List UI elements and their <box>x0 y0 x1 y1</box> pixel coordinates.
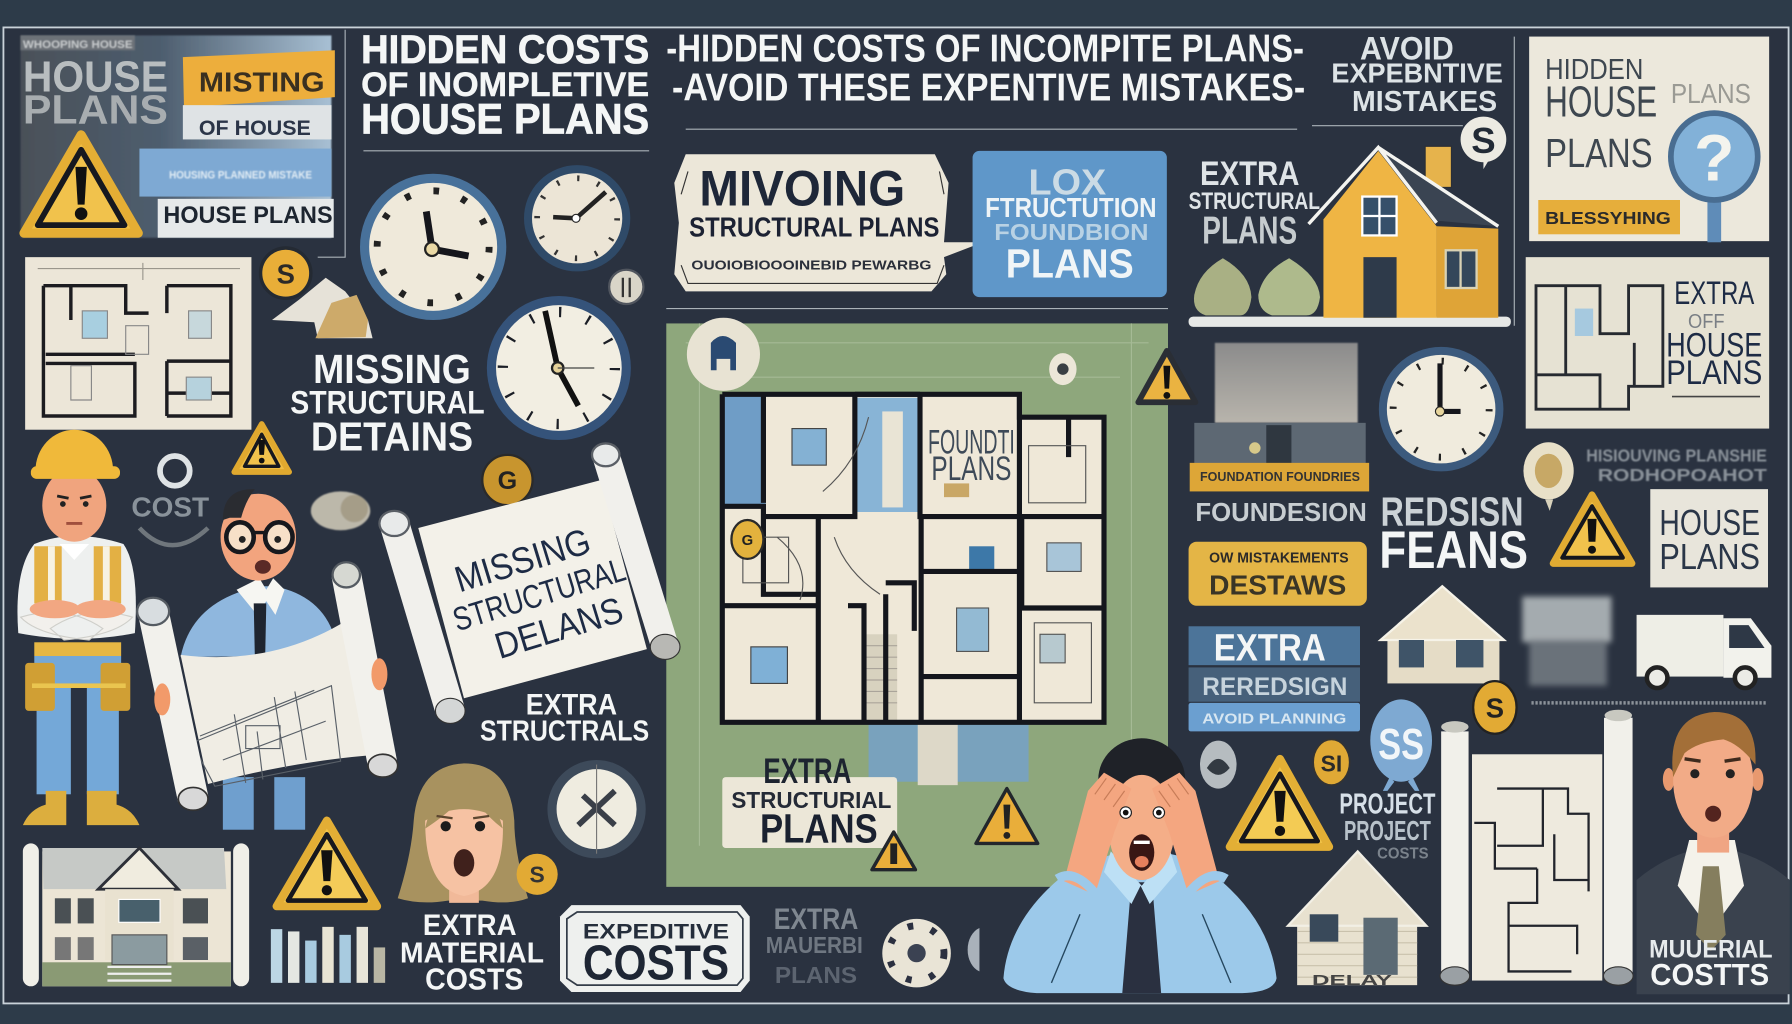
panel: extra house plans sheet: OFF <box>1688 310 1725 333</box>
panel: foundation illustration <box>1190 343 1369 491</box>
panel: house plans label stack: HOUSE <box>23 53 168 101</box>
text: extra material costs: MATERIAL <box>400 937 544 969</box>
text: missing structural details: MISSING <box>313 346 471 392</box>
heading: avoid expensive mistakes <box>1331 30 1503 118</box>
heading: hidden costs of incomplete house plans: HIDDEN COSTS <box>361 28 649 72</box>
label: extra structural plans: EXTRA <box>763 751 851 791</box>
text: extra structural plans: PLANS <box>1202 209 1297 252</box>
icon: dollar coin <box>261 248 311 298</box>
text: missing structural details: STRUCTURAL <box>290 385 485 421</box>
icon: warning triangle lower right <box>1230 759 1329 847</box>
icon: warning triangles in plan <box>872 789 1038 870</box>
scroll: missing structural delans <box>379 443 680 723</box>
icon: rubble <box>311 491 370 530</box>
divider dots <box>1531 701 1766 704</box>
panel: extra house plans sheet: PLANS <box>1666 354 1762 392</box>
icon: coin with dollar <box>1473 681 1517 734</box>
icon: coin on plan: G <box>742 533 753 549</box>
icon: small half disc <box>968 928 979 971</box>
heading: avoid expensive mistakes: EXPEBNTIVE <box>1331 57 1503 88</box>
orange label <box>183 50 335 107</box>
panel: missing structural plans callout: MIVOING <box>699 160 905 217</box>
icon: circle with x <box>552 765 641 854</box>
text: cost ghost label <box>131 456 209 545</box>
panel: house plans label stack: PLANS <box>23 86 168 132</box>
panel: house photo between scrolls <box>23 843 249 986</box>
text: faded extra material plans: MAUERBI <box>766 932 863 958</box>
icon: suited man: COSTTS <box>1650 957 1769 992</box>
panel: house plans label stack <box>21 35 335 238</box>
panel: top right hidden house plans sheet: PLANS <box>1545 130 1653 176</box>
text: extra structurals: EXTRA <box>526 688 617 721</box>
icon: warning triangle large top left <box>24 135 138 233</box>
text: extra structural plans: STRUCTURAL <box>1189 188 1320 215</box>
label: extra redesign stack <box>1189 626 1360 731</box>
label: yellow designs plate: OW MISTAKEMENTS <box>1209 550 1349 566</box>
panel: blue foundation card: FOUNDBION <box>994 219 1149 245</box>
text: extra structurals <box>480 688 649 748</box>
text: project project costs: PROJECT <box>1344 815 1431 846</box>
house plans label <box>158 199 334 238</box>
text: extra structural plans: EXTRA <box>1200 155 1299 193</box>
panel: blue foundation card: FTRUCTUTION <box>985 192 1157 223</box>
floor plan: FOUNDTI <box>928 424 1015 462</box>
icon: round pin <box>1523 442 1574 511</box>
icon: coin near warning: SI <box>1321 750 1342 776</box>
icon: coin bottom <box>517 854 558 895</box>
icon: yellow house on shelf <box>1189 146 1511 327</box>
text: missing structural details: DETAINS <box>311 413 473 459</box>
clock four <box>1383 351 1499 467</box>
text: extra material costs: COSTS <box>425 962 523 997</box>
panel: house plans label stack: WHOOPING HOUSE <box>23 39 133 51</box>
icon: coin bottom: S <box>530 861 545 887</box>
panel: blue foundation card <box>973 151 1167 297</box>
text: missing structural details <box>290 346 485 459</box>
icon: magnifier with question mark <box>1671 113 1758 242</box>
panel: blue foundation card: PLANS <box>1006 241 1134 287</box>
label: yellow designs plate <box>1189 542 1367 606</box>
panel: top right hidden house plans sheet: PLANS <box>1671 78 1751 109</box>
icon: pin coin: G <box>498 467 517 495</box>
text: faded extra material plans <box>766 903 863 988</box>
icon: dollar speech balloon <box>1370 699 1432 791</box>
icon: crumpled paper <box>272 278 373 338</box>
label: expeditive costs <box>560 905 750 992</box>
label: expeditive costs: COSTS <box>583 936 729 990</box>
panel: missing structural plans callout: STRUCTURAL PLANS <box>689 212 939 243</box>
blue band: HOUSING PLANNED MISTAKE <box>169 169 312 181</box>
text: extra structural plans <box>1189 155 1320 252</box>
icon: dollar speech bubble: S <box>1471 120 1496 161</box>
icon: shocked woman <box>398 763 528 903</box>
icon: dollar speech balloon: SS <box>1378 721 1424 769</box>
floor plan: PLANS <box>931 450 1011 488</box>
panel: top right hidden house plans sheet <box>1529 37 1769 242</box>
panel: top right hidden house plans sheet: HIDDEN <box>1545 54 1643 86</box>
icon: warning triangle on plan edge <box>1138 351 1195 402</box>
icon: warning triangle right <box>1553 495 1632 563</box>
icon: cream house <box>1381 586 1504 683</box>
divider lines <box>318 30 1514 326</box>
icon: coin with dollar: S <box>1486 693 1504 724</box>
text: faded extra material plans: EXTRA <box>774 903 858 936</box>
icon: small grey badge <box>1200 741 1237 789</box>
clock one <box>365 178 502 315</box>
text: extra material costs <box>400 909 544 997</box>
panel: top right hidden house plans sheet: HOUSE <box>1545 79 1657 127</box>
icon: office man with blueprint <box>137 489 398 830</box>
heading: central banner: -AVOID THESE EXPENTIVE MISTAKES- <box>672 67 1305 110</box>
bar chart <box>271 927 385 983</box>
heading: avoid expensive mistakes: MISTAKES <box>1352 86 1497 118</box>
scroll: missing structural delans: MISSING <box>450 520 595 600</box>
yellow sign: BLESSYHING <box>1545 208 1671 228</box>
icon: dotted disc <box>882 919 951 987</box>
heading: central banner <box>666 28 1305 110</box>
icon: suited man <box>1637 712 1790 994</box>
icon: dollar coin: S <box>277 258 295 289</box>
floor plan <box>722 394 1105 723</box>
panel: floor plan left <box>25 257 251 430</box>
house plans label: HOUSE PLANS <box>163 202 333 229</box>
icon: warning triangle bottom <box>277 821 377 906</box>
icon: round logo <box>687 318 760 391</box>
text: foundesion: FOUNDESION <box>1195 497 1367 527</box>
rollers <box>379 443 680 723</box>
text: faded extra material plans: PLANS <box>775 962 857 988</box>
icon: blurred rubble <box>1522 597 1611 686</box>
heading: avoid expensive mistakes: AVOID <box>1360 30 1454 66</box>
panel: extra house plans sheet: HOUSE <box>1666 327 1762 365</box>
heading: hidden costs of incomplete house plans: HOUSE PLANS <box>361 96 649 143</box>
text: project project costs <box>1339 789 1436 862</box>
label: house plans right: PLANS <box>1659 536 1760 577</box>
icon: coin on plan <box>731 520 763 559</box>
text: redesign plans <box>1379 489 1528 580</box>
icon: delivery truck <box>1637 615 1771 688</box>
panel: extra house plans sheet <box>1526 257 1769 429</box>
text: extra material costs: EXTRA <box>423 909 517 942</box>
yellow plate: FOUNDATION FOUNDRIES <box>1200 470 1360 484</box>
icon: construction worker <box>17 430 139 825</box>
bushes <box>1194 258 1320 315</box>
rollers <box>137 562 398 810</box>
label: extra structural plans: STRUCTURIAL <box>731 787 891 813</box>
icon: small warning triangle <box>234 424 289 472</box>
label: yellow designs plate: DESTAWS <box>1209 569 1346 600</box>
icon: small oval pin <box>1049 353 1077 385</box>
scroll: missing structural delans: DELANS <box>490 589 628 667</box>
icon: stressed man <box>1003 738 1277 993</box>
label: extra structural plans: PLANS <box>760 805 878 851</box>
label: extra structural plans <box>722 751 897 851</box>
icon: magnifier with question mark: ? <box>1694 122 1735 196</box>
panel: extra house plans sheet: EXTRA <box>1674 275 1755 311</box>
blueprint sheet <box>181 621 369 786</box>
label: house plans right: HOUSE <box>1659 502 1760 543</box>
icon: lower house: DELAY <box>1312 973 1392 989</box>
clock two <box>528 169 626 267</box>
text: redesign plans: FEANS <box>1379 521 1528 580</box>
icon: suited man: MUUERIAL <box>1649 936 1773 964</box>
icon: lower house <box>1288 851 1426 989</box>
text: redesign plans: REDSISN <box>1381 489 1523 535</box>
icon: pin coin <box>482 455 533 522</box>
text: project project costs: COSTS <box>1377 845 1429 862</box>
panel: green site plan <box>666 318 1168 887</box>
panel: missing structural plans callout <box>674 154 983 291</box>
of house label: OF HOUSE <box>199 115 311 140</box>
text: extra structurals: STRUCTRALS <box>480 716 649 748</box>
text: project project costs: PROJECT <box>1339 789 1436 821</box>
label: extra redesign stack: AVOID PLANNING <box>1202 711 1346 727</box>
scroll: maze blueprint <box>1440 710 1633 985</box>
icon: dollar speech bubble <box>1461 117 1506 169</box>
text: faded sign text: RODHOPOAHOT <box>1598 465 1768 485</box>
orange label: MISTING <box>199 66 325 97</box>
of house label <box>183 105 331 140</box>
text: cost ghost label: COST <box>131 492 209 523</box>
icon: small badge <box>609 270 643 304</box>
label: extra redesign stack: EXTRA <box>1214 627 1326 669</box>
yellow sign <box>1538 200 1680 234</box>
panel: blue foundation card: LOX <box>1029 161 1107 202</box>
yellow plate <box>1190 463 1369 491</box>
label: house plans right <box>1650 489 1768 587</box>
blue band <box>139 149 331 197</box>
heading: hidden costs of incomplete house plans: OF INOMPLETIVE <box>361 66 649 104</box>
heading: hidden costs of incomplete house plans <box>361 28 649 143</box>
text: faded sign text: HISIOUVING PLANSHIE <box>1586 446 1767 466</box>
label: extra redesign stack: REREDSIGN <box>1202 673 1347 701</box>
icon: coin near warning <box>1313 739 1350 785</box>
heading: central banner: -HIDDEN COSTS OF INCOMPITE PLANS- <box>666 28 1304 71</box>
panel: missing structural plans callout: OUOIOBIOOOINEBID PEWARBG <box>691 259 931 273</box>
clock three <box>491 301 626 435</box>
scroll: missing structural delans: STRUCTURAL <box>449 552 630 639</box>
label: expeditive costs: EXPEDITIVE <box>583 918 729 943</box>
text: faded sign text <box>1586 446 1768 485</box>
